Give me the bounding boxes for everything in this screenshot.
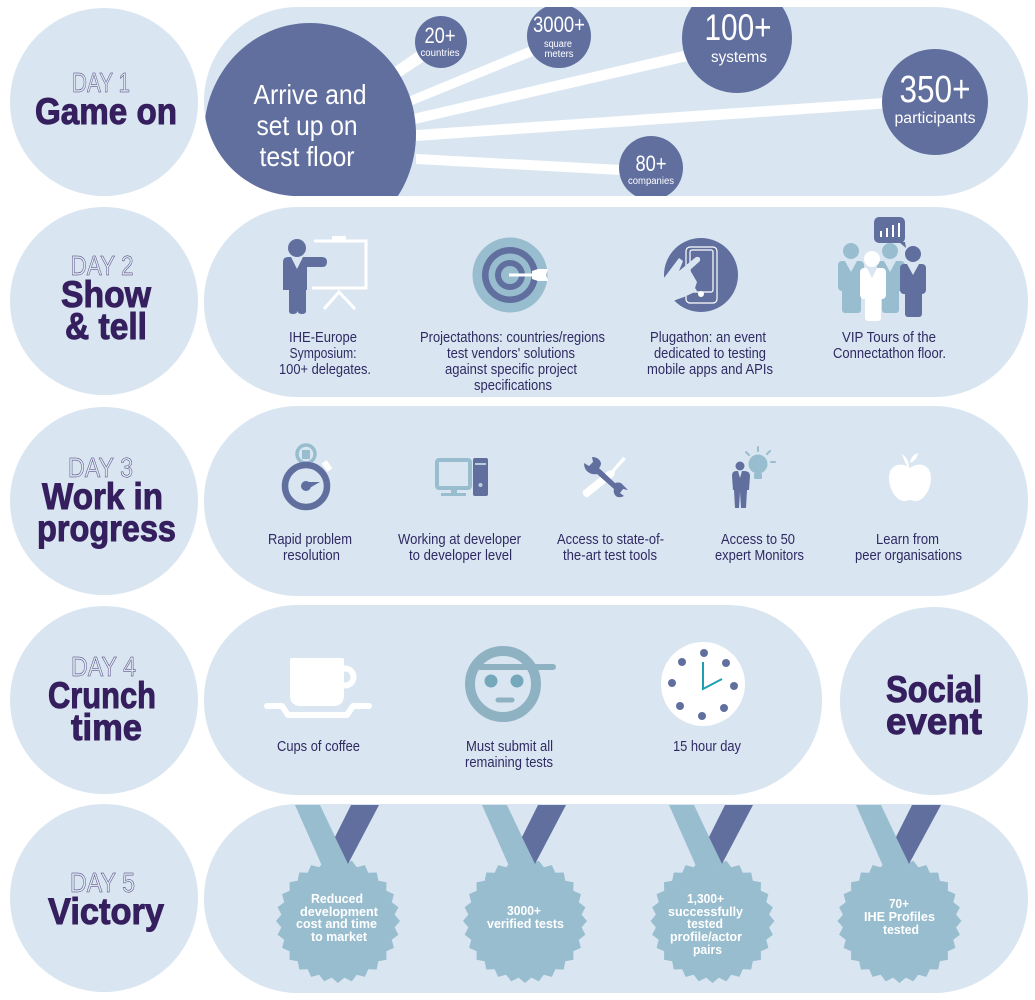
bubble: 80+ companies: companies [628,176,674,187]
day 3 badge: Work in [42,476,163,517]
icon: desktop computer [437,458,488,496]
medal: IHE profiles [838,805,962,983]
bubble: 20+ countries: 20+ [424,23,456,48]
day 5 badge: DAY 5 [70,867,135,898]
caption: cups of coffee: Cups of coffee [277,739,360,755]
day 5 badge [10,804,198,992]
main bubble [205,23,416,196]
day 4 badge: Crunch [48,675,156,716]
caption: 15 hour day: 15 hour day [673,739,742,755]
caption: projectathons: specifications [474,378,552,394]
caption: test tools: Access to state-of- [557,532,664,548]
day 1 badge: Game on [35,91,177,132]
caption: symposium: Symposium: [290,346,356,362]
caption: projectathons: test vendors' solutions [447,346,575,362]
medal: IHE profiles: IHE Profiles [864,910,935,924]
caption: projectathons: against specific project [445,362,577,378]
bubble: 350+ participants: participants [894,110,976,127]
medal: profile actor pairs [650,805,774,983]
social event badge: Social [886,669,982,710]
panel: day 4 crunch time [204,605,822,795]
medal: profile actor pairs: pairs [693,943,722,957]
caption: remaining tests: remaining tests [465,755,553,771]
main bubble: set up on [256,110,358,141]
day 2 badge [10,207,198,395]
caption: plugathon: Plugathon: an event [650,330,766,346]
day 4 badge: time [71,707,142,748]
caption: symposium [279,330,371,378]
bubble: 80+ companies: 80+ [636,151,666,176]
icon: man with light bulb [732,447,775,508]
medal: profile actor pairs: tested [687,917,723,931]
panel: day 3 work in progress [204,406,1028,596]
medal: profile actor pairs: profile/actor [670,930,742,944]
connector lines [393,46,884,175]
caption: developer level [398,532,521,564]
medal: verified tests: verified tests [487,917,564,931]
caption: plugathon [647,330,773,378]
caption: test tools: the-art test tools [563,548,657,564]
caption: plugathon: dedicated to testing [654,346,766,362]
medal: IHE profiles: tested [883,923,919,937]
caption: plugathon: mobile apps and APIs [647,362,773,378]
icon: hand on phone [660,238,738,312]
medal: reduced cost: cost and time [296,917,377,931]
medal: IHE profiles: 70+ [889,897,909,911]
caption: remaining tests: Must submit all [466,739,553,755]
caption: symposium: IHE-Europe [289,330,357,346]
bubble: 3000+ square meters [527,4,591,68]
social event badge: event [886,701,982,742]
day 5 badge: Victory [48,891,164,932]
bubble: 80+ companies [619,136,683,200]
icon: stopwatch [285,445,332,507]
day 2 badge: & tell [65,306,147,347]
caption: VIP tours [833,330,946,362]
bubble: 100+ systems [682,0,792,93]
caption: rapid problem resolution [268,532,352,564]
caption: test tools [557,532,664,564]
caption: expert monitors: expert Monitors [715,548,804,564]
caption: developer level: to developer level [409,548,512,564]
icon: clock [661,642,745,726]
bubble: 3000+ square meters: 3000+ [533,12,585,37]
icon: wrench and screwdriver [583,457,628,497]
icon: apple [889,453,931,501]
panel: day 5 victory [204,804,1028,993]
caption: VIP tours: Connectathon floor. [833,346,946,362]
caption: remaining tests [465,739,553,771]
caption: symposium: 100+ delegates. [279,362,371,378]
speech bubble chart [874,217,906,248]
day 2 badge: DAY 2 [70,250,134,281]
day 4 badge [10,606,198,794]
caption: peer organisations: peer organisations [855,548,962,564]
medal: reduced cost: Reduced [311,892,363,906]
caption: peer organisations [855,532,962,564]
caption: projectathons: Projectathons: countries/regions [420,330,605,346]
bubble: 350+ participants [882,49,988,155]
social event badge [840,607,1028,795]
caption: expert monitors [715,532,804,564]
day 4 badge: DAY 4 [71,651,136,682]
icon: dartboard [472,238,548,312]
bubble: 20+ countries: countries [420,48,460,59]
bubble: 100+ systems: 100+ [704,7,772,48]
caption: peer organisations: Learn from [876,532,939,548]
bubble: 3000+ square meters: meters [544,49,574,60]
panel: day 2 show and tell [204,207,1028,397]
medal: profile actor pairs: successfully [668,905,743,919]
panel: day 1 arrive and set up [204,7,1028,196]
medal: reduced cost: development [300,905,379,919]
day 3 badge: progress [37,508,176,549]
icon: coffee cup [267,658,369,715]
bubble: 100+ systems: systems [711,49,767,66]
caption: developer level: Working at developer [398,532,521,548]
medal: profile actor pairs: 1,300+ [687,892,724,906]
bubble: 3000+ square meters: square [544,39,572,50]
day 3 badge [10,407,198,595]
main bubble: Arrive and [254,79,366,110]
icon: VIP tour group [838,217,926,321]
day 1 badge: DAY 1 [72,67,130,98]
bubble: 20+ countries [415,16,467,68]
medal: verified tests [463,805,587,983]
medal: verified tests: 3000+ [507,904,541,918]
caption: expert monitors: Access to 50 [721,532,795,548]
caption: rapid problem resolution: resolution [283,548,340,564]
icon: tired face [470,651,553,717]
bubble: 350+ participants: 350+ [900,69,970,111]
caption: projectathons [420,330,605,394]
day 3 badge: DAY 3 [68,452,133,483]
day 1 badge [10,8,198,196]
medal: reduced cost [276,805,400,983]
caption: rapid problem resolution: Rapid problem [268,532,352,548]
main bubble: test floor [260,141,354,172]
caption: VIP tours: VIP Tours of the [842,330,936,346]
medal: reduced cost: to market [311,930,368,944]
day 2 badge: Show [61,274,151,315]
icon: presenter at board [283,236,366,314]
